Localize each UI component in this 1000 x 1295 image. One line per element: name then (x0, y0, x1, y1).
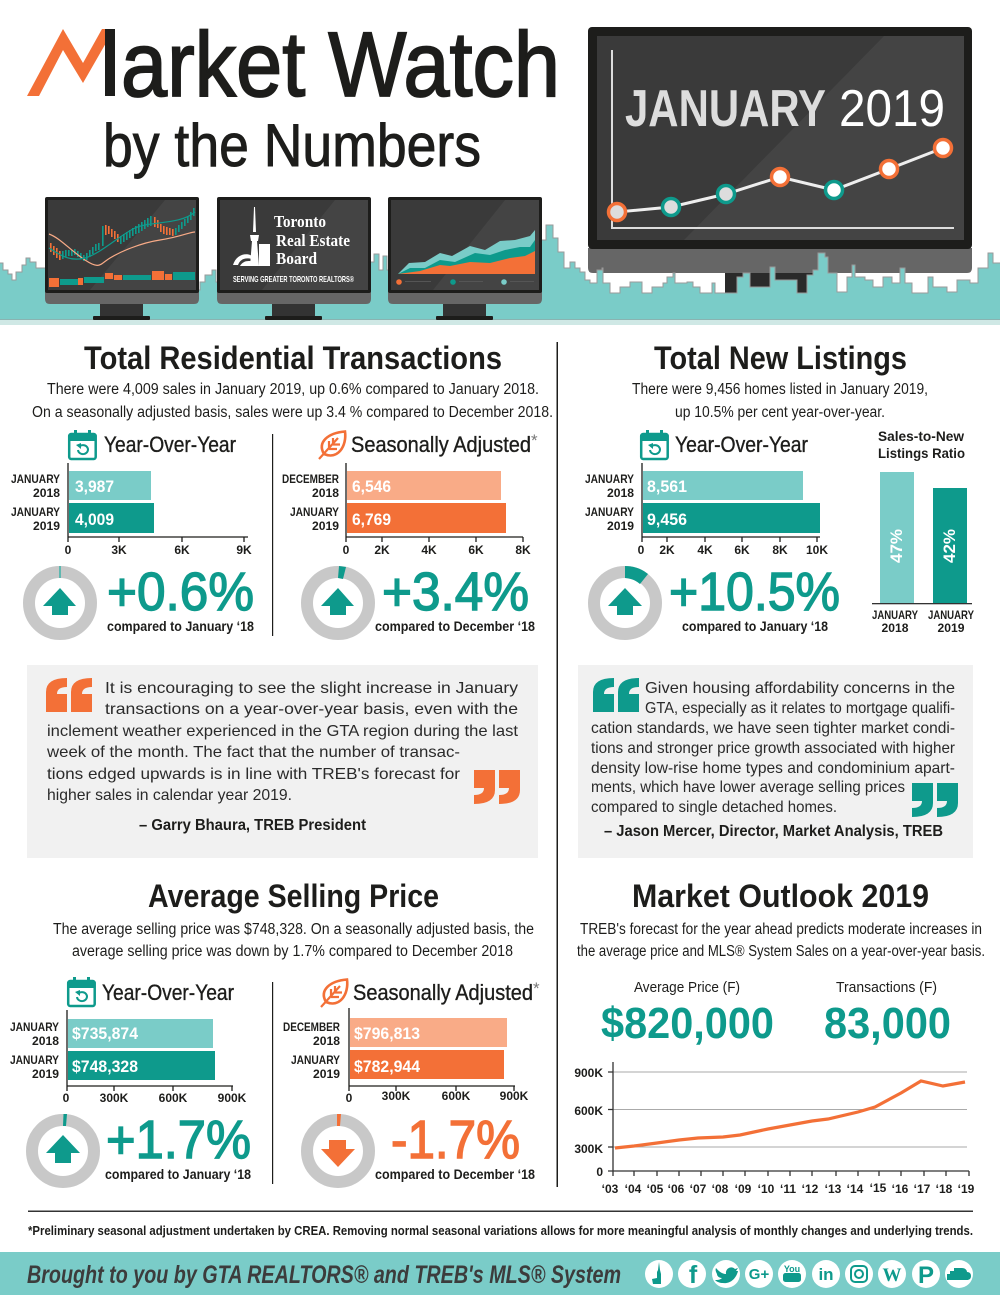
attribution: – Garry Bhaura, TREB President (139, 817, 367, 834)
donut: +0.6% (29, 566, 91, 634)
panel: total new listings (585, 340, 974, 635)
title: arket Watch (121, 14, 560, 116)
year label: 2019 (839, 80, 945, 138)
bar chart: new listings: 2K (659, 543, 675, 557)
bar chart: price seasonally adjusted: $782,944 (354, 1057, 421, 1076)
bar chart: price year over year: 900K (218, 1091, 247, 1105)
stat: transactions (824, 979, 951, 1048)
logo wordmark: Real Estate (276, 231, 350, 250)
monitor: area chart (388, 197, 542, 320)
bar chart: seasonally adjusted (282, 463, 531, 557)
line chart: average price forecast: 300K (574, 1142, 603, 1156)
line chart: average price forecast: ‘15 (870, 1181, 887, 1195)
bar chart: price seasonally adjusted: 2018 (313, 1034, 340, 1048)
bar chart: price seasonally adjusted: DECEMBER (283, 1020, 340, 1034)
icon: opening quote (593, 678, 639, 712)
panel: president quote (27, 665, 538, 858)
column chart: sales-to-new listings ratio: JANUARY (872, 608, 918, 622)
intro text (32, 381, 553, 421)
column chart: sales-to-new listings ratio: 42% (940, 529, 959, 563)
stat: average price: $820,000 (601, 999, 774, 1048)
bar chart: year over year: 4,009 (75, 510, 114, 529)
bar chart: seasonally adjusted: 0 (343, 543, 350, 557)
quote text: week of the month. The fact that the number of transac- (46, 744, 460, 761)
skyline (0, 225, 1000, 325)
bar chart: new listings: 2018 (607, 486, 634, 500)
asterisk: * (533, 979, 540, 998)
line chart: average price forecast (574, 1062, 975, 1196)
bar chart: price seasonally adjusted (283, 1008, 529, 1105)
intro text (632, 381, 928, 421)
bar chart: seasonally adjusted: 6K (468, 543, 484, 557)
bar chart: new listings: JANUARY (585, 472, 634, 486)
subtitle: by the Numbers (103, 112, 481, 179)
bar chart: year over year: JANUARY (11, 472, 60, 486)
stat caption: compared to January ‘18 (107, 619, 254, 634)
line chart: average price forecast: ‘13 (825, 1182, 842, 1196)
panel: analyst quote (578, 665, 973, 858)
bar chart: year over year: 2019 (33, 519, 60, 533)
line chart: average price forecast: ‘18 (936, 1182, 953, 1196)
stat: average price (601, 979, 774, 1048)
line chart: average price forecast: ‘14 (847, 1182, 864, 1196)
quote text: transactions on a year-over-year basis, even with the (105, 701, 518, 718)
column chart: sales-to-new listings ratio: 47% (887, 529, 906, 563)
donut: +1.7% (32, 1114, 94, 1182)
bar chart: new listings: 4K (697, 543, 713, 557)
bar chart: seasonally adjusted: 2019 (312, 519, 339, 533)
social icons: W (882, 1265, 902, 1286)
social icons: You (784, 1264, 800, 1274)
quote text: It is encouraging to see the slight increase in January (105, 680, 518, 697)
stat: -1.7%: -1.7% (391, 1110, 520, 1170)
heading: Total New Listings (654, 340, 907, 376)
bar chart: price seasonally adjusted: 600K (442, 1089, 471, 1103)
bar chart: year over year: 3K (111, 543, 127, 557)
asterisk: * (531, 431, 538, 450)
logo tagline: SERVING GREATER TORONTO REALTORS® (233, 274, 354, 284)
intro text (577, 921, 985, 960)
bar chart: seasonally adjusted: JANUARY (290, 505, 339, 519)
icon: leaf (319, 432, 345, 459)
line chart: average price forecast: ‘04 (625, 1182, 642, 1196)
heading: Average Selling Price (148, 878, 439, 914)
bar chart: new listings (585, 463, 828, 557)
bar chart: price year over year: $748,328 (72, 1057, 138, 1076)
icon: CN Tower (233, 207, 270, 266)
monitor: TREB logo (217, 197, 371, 320)
bar chart: price year over year: JANUARY (10, 1053, 59, 1067)
quote text: higher sales in calendar year 2019. (47, 787, 292, 804)
bar chart: year over year: JANUARY (11, 505, 60, 519)
bar chart: seasonally adjusted: 8K (515, 543, 531, 557)
quote text (46, 680, 519, 804)
stat: transactions: Transactions (F) (836, 979, 937, 996)
bar chart: year over year: 6K (174, 543, 190, 557)
stat caption: compared to December ‘18 (375, 619, 535, 634)
bar chart: year over year: 2018 (33, 486, 60, 500)
column divider (556, 342, 558, 1187)
stat: transactions: 83,000 (824, 999, 951, 1048)
panel: total residential transactions (11, 340, 553, 636)
stat: average price: Average Price (F) (634, 979, 740, 996)
line chart: average price forecast: 0 (596, 1165, 603, 1179)
stat: +3.4%: +3.4% (382, 562, 529, 622)
bar chart: new listings: 6K (734, 543, 750, 557)
bar chart: price year over year: 0 (63, 1091, 70, 1105)
bar chart: price seasonally adjusted: 0 (346, 1091, 353, 1105)
chart title (878, 428, 965, 461)
quote text: density low-rise home types and condominium apart- (591, 760, 955, 777)
bar chart: new listings: 9,456 (647, 510, 687, 529)
bar chart: price year over year: JANUARY (10, 1020, 59, 1034)
line chart: average price forecast: ‘10 (758, 1182, 775, 1196)
bar chart: new listings: 8,561 (647, 477, 687, 496)
sub-heading: Year-Over-Year (675, 432, 808, 457)
bar chart: seasonally adjusted: 2018 (312, 486, 339, 500)
icon: opening quote (46, 678, 92, 712)
bar chart: price seasonally adjusted: 2019 (313, 1067, 340, 1081)
icon: calendar (641, 430, 668, 459)
line chart: average price forecast: 600K (574, 1104, 603, 1118)
heading: Market Outlook 2019 (632, 878, 929, 914)
line chart: average price forecast: ‘12 (802, 1182, 819, 1196)
bar chart: new listings: 10K (806, 543, 828, 557)
bar chart: price seasonally adjusted: $796,813 (354, 1024, 420, 1043)
stat: +10.5%: +10.5% (669, 562, 840, 622)
intro text: There were 4,009 sales in January 2019, up 0.6% compared to January 2018. (47, 381, 539, 398)
screen line chart (608, 140, 952, 220)
donut: +10.5% (594, 566, 656, 634)
panel: average selling price (10, 878, 540, 1184)
logo M (27, 29, 115, 96)
bar chart: price year over year: 600K (159, 1091, 188, 1105)
icon: closing quote (912, 783, 958, 817)
column chart: sales-to-new listings ratio (872, 472, 974, 635)
bar chart: seasonally adjusted: DECEMBER (282, 472, 339, 486)
bar chart: seasonally adjusted: 6,769 (352, 510, 391, 529)
line chart: average price forecast: ‘19 (958, 1182, 975, 1196)
stat: +0.6%: +0.6% (107, 562, 254, 622)
social icons: f (689, 1261, 698, 1289)
sub-heading: Year-Over-Year (102, 980, 234, 1005)
column chart: sales-to-new listings ratio: 2018 (882, 621, 909, 635)
monitor: candlestick chart (45, 197, 199, 320)
logo wordmark (274, 212, 350, 268)
social icons: P (918, 1262, 934, 1289)
bar chart: price year over year: $735,874 (72, 1024, 139, 1043)
quote text (591, 680, 956, 816)
donut: -1.7% (307, 1114, 369, 1182)
bar chart: price seasonally adjusted: JANUARY (291, 1053, 340, 1067)
sub-divider (272, 434, 273, 636)
chart title: Sales-to-New (878, 428, 964, 444)
line chart: average price forecast: ‘08 (712, 1182, 729, 1196)
stat: +1.7%: +1.7% (106, 1110, 251, 1170)
panel: market outlook (574, 878, 985, 1196)
bar chart: year over year: 0 (65, 543, 72, 557)
intro text: up 10.5% per cent year-over-year. (675, 404, 885, 421)
intro text: The average selling price was $748,328. On a seasonally adjusted basis, the (53, 921, 534, 938)
bar chart: seasonally adjusted: 6,546 (352, 477, 391, 496)
intro text (53, 921, 534, 960)
footnote rule (28, 1210, 973, 1212)
logo wordmark: Board (276, 249, 317, 268)
heading: Total Residential Transactions (84, 340, 502, 376)
bar chart: price year over year: 300K (100, 1091, 129, 1105)
bar chart: price seasonally adjusted: 900K (500, 1089, 529, 1103)
bar chart: seasonally adjusted: 4K (421, 543, 437, 557)
social icons: G+ (749, 1266, 769, 1283)
masthead (27, 14, 560, 179)
line chart: average price forecast: ‘17 (914, 1182, 931, 1196)
line chart: average price forecast: ‘05 (647, 1182, 664, 1196)
icon: calendar (69, 430, 96, 459)
quote text: inclement weather experienced in the GTA region during the last (47, 723, 519, 740)
sub-heading: Year-Over-Year (104, 432, 236, 457)
quote text: tions and stronger price growth associated with higher (591, 740, 956, 757)
line chart: average price forecast: ‘09 (735, 1182, 752, 1196)
bar chart: year over year: 3,987 (75, 477, 114, 496)
bar chart: seasonally adjusted: 2K (374, 543, 390, 557)
quote text: GTA, especially as it relates to mortgage qualifi- (645, 700, 955, 717)
social icons (645, 1260, 973, 1289)
sub-heading: Seasonally Adjusted (353, 980, 533, 1005)
donut: +3.4% (307, 566, 369, 634)
intro text: There were 9,456 homes listed in January 2019, (632, 381, 928, 398)
line chart: average price forecast: ‘16 (892, 1182, 909, 1196)
intro text: average selling price was down by 1.7% compared to December 2018 (72, 943, 513, 960)
line chart: average price forecast: 900K (574, 1066, 603, 1080)
bar chart: year over year (11, 463, 252, 557)
icon: closing quote (474, 770, 520, 804)
bar chart: price seasonally adjusted: 300K (382, 1089, 411, 1103)
bar chart: price year over year: 2018 (32, 1034, 59, 1048)
stat caption: compared to December ‘18 (375, 1167, 535, 1182)
line chart: average price forecast: ‘11 (780, 1182, 796, 1196)
line chart: average price forecast: ‘06 (668, 1182, 685, 1196)
bar chart: new listings: 0 (638, 543, 645, 557)
quote text: ments, which have lower average selling prices (591, 779, 905, 796)
attribution: – Jason Mercer, Director, Market Analysis, TREB (604, 823, 943, 840)
sub-heading: Seasonally Adjusted (351, 432, 531, 457)
quote text: compared to single detached homes. (591, 799, 837, 816)
column chart: sales-to-new listings ratio: 2019 (938, 621, 965, 635)
stat caption: compared to January ‘18 (105, 1167, 251, 1182)
bar chart: year over year: 9K (236, 543, 252, 557)
column chart: sales-to-new listings ratio: JANUARY (928, 608, 974, 622)
sub-divider (272, 982, 273, 1184)
stat caption: compared to January ‘18 (682, 619, 828, 634)
logo wordmark: Toronto (274, 212, 326, 231)
bar chart: new listings: JANUARY (585, 505, 634, 519)
bar chart: new listings: 2019 (607, 519, 634, 533)
footer text: Brought to you by GTA REALTORS® and TREB's MLS® System (27, 1261, 621, 1289)
footer band (0, 1252, 1000, 1295)
quote text: tions edged upwards is in line with TREB's forecast for (47, 766, 461, 783)
bar chart: price year over year: 2019 (32, 1067, 59, 1081)
line chart: average price forecast: ‘07 (690, 1182, 707, 1196)
icon: leaf (321, 980, 347, 1007)
quote text: cation standards, we have seen tighter market condi- (591, 720, 955, 737)
bar chart: new listings: 8K (772, 543, 788, 557)
intro text: On a seasonally adjusted basis, sales were up 3.4 % compared to December 2018. (32, 404, 553, 421)
month label: JANUARY (625, 80, 826, 138)
quote text: Given housing affordability concerns in the (645, 680, 955, 697)
main monitor: January 2019 (588, 27, 972, 296)
social icons: in (818, 1265, 834, 1284)
chart title: Listings Ratio (878, 445, 965, 461)
icon: calendar (68, 977, 95, 1006)
line chart: average price forecast: ‘03 (602, 1182, 619, 1196)
bar chart: price year over year (10, 1010, 247, 1105)
